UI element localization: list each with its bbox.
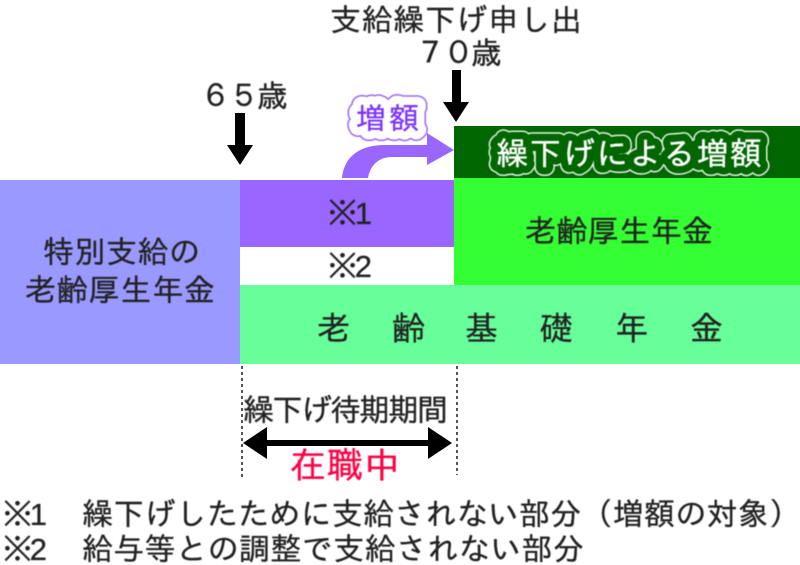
panel: old-age basic pension: 老 bbox=[317, 310, 350, 347]
panel: adjusted portion note 2 bbox=[240, 247, 454, 285]
label: increase: 増額 bbox=[356, 103, 419, 136]
panel: old-age basic pension: 基 bbox=[465, 310, 498, 347]
label: deferral waiting period: 繰下げ待期期間 bbox=[243, 393, 448, 428]
arrow: waiting period span bbox=[243, 427, 452, 459]
panel: deferred portion note 1: ※1 bbox=[327, 196, 372, 231]
panel: increase from deferral: 繰下げによる増額 bbox=[496, 136, 762, 172]
panel: old-age basic pension: 金 bbox=[690, 310, 723, 347]
panel: old-age employees pension: 老齢厚生年金 bbox=[525, 214, 713, 249]
panel: special old-age pension: 特別支給の bbox=[43, 235, 200, 270]
arrow: age 65 marker bbox=[227, 113, 253, 165]
label: increase: 増額 bbox=[356, 103, 419, 136]
panel: old-age employees pension bbox=[454, 178, 800, 285]
arrow: age 70 marker bbox=[443, 70, 469, 122]
label: deferral request: 支給繰下げ申し出 bbox=[330, 3, 582, 38]
panel: special old-age pension: 老齢厚生年金 bbox=[25, 273, 215, 308]
arrow: increase curved arrow bbox=[342, 133, 454, 178]
panel: old-age basic pension bbox=[240, 285, 800, 364]
panel: deferred portion note 1 bbox=[240, 180, 454, 247]
note 1: 繰下げしたために支給されない部分（増額の対象） bbox=[82, 497, 800, 532]
panel: old-age basic pension: 年 bbox=[615, 310, 648, 347]
panel: old-age basic pension: 礎 bbox=[540, 310, 573, 347]
panel: adjusted portion note 2: ※2 bbox=[327, 249, 372, 284]
panel: increase from deferral: 繰下げによる増額 bbox=[496, 136, 762, 172]
panel: increase from deferral: 繰下げによる増額 bbox=[496, 136, 762, 172]
label: age 70: ７０歳 bbox=[415, 36, 502, 71]
panel: increase from deferral bbox=[454, 126, 800, 178]
panel: special old-age pension bbox=[0, 180, 240, 364]
panel: old-age basic pension: 齢 bbox=[392, 310, 425, 347]
note 1: ※1 bbox=[2, 497, 47, 532]
label: age 65: ６５歳 bbox=[200, 79, 288, 114]
dotted line: waiting period start bbox=[241, 366, 243, 477]
label: increase: 増額 bbox=[356, 103, 419, 136]
dotted line: waiting period end bbox=[456, 366, 458, 475]
label: employed: 在職中 bbox=[290, 445, 400, 486]
